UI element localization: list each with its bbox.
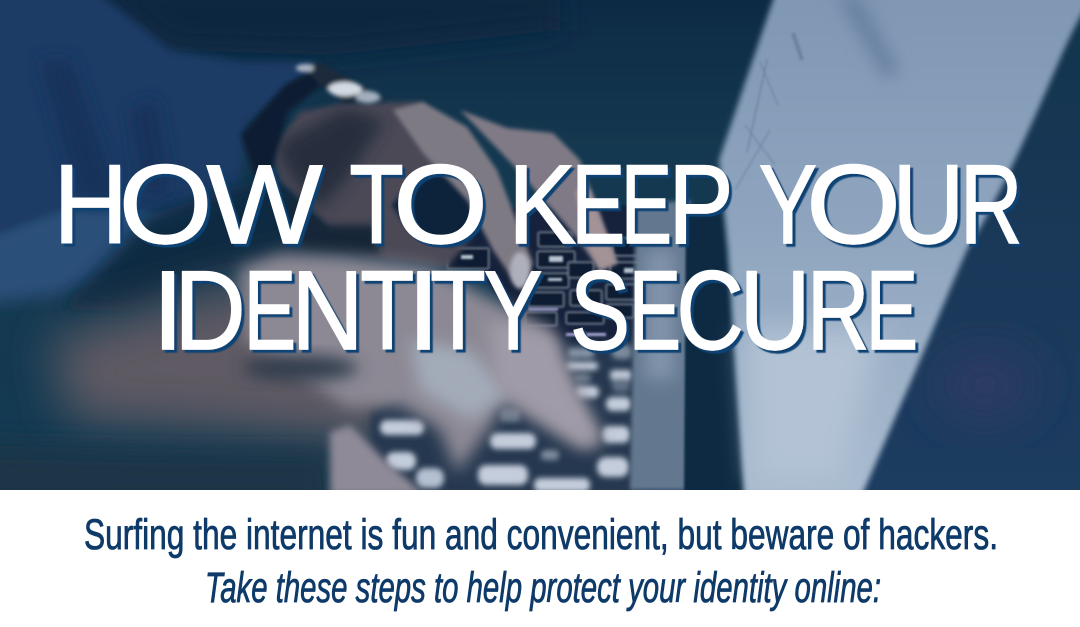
bright finger area [410,340,510,420]
title line 1: O [393,142,488,267]
title line 2: E [244,248,296,373]
key glyph highlights [461,255,634,336]
title line 2: C [676,248,744,373]
title line 2: I [152,248,184,373]
sleeve [0,0,320,245]
bottom left shadow [0,435,326,490]
dark crease [242,355,358,381]
lower hand, blurred wide [50,270,500,440]
watch body [296,62,386,103]
title line 2: N [291,248,364,373]
title line 2: Y [484,248,541,373]
dark gap between thumb and finger [392,172,488,246]
watch strap [241,66,322,178]
screen light lower-left [745,330,880,480]
title line 2: D [174,248,246,373]
screen shade band [835,0,900,80]
second finger lower, pink [575,190,617,270]
purple tint on the right [935,350,1035,420]
second finger [460,110,617,270]
lower keyboard base [370,340,642,495]
top dark shade [178,30,398,38]
title line 2 [152,248,918,373]
title line 2: E [629,248,681,373]
sleeve fold shade [40,60,170,200]
laptop body strip [630,200,690,490]
index finger [393,102,533,290]
title line 1: W [206,142,323,267]
title line 2: U [740,248,810,373]
upper hand back [274,99,472,269]
title line 1: O [119,142,212,267]
title [54,142,1022,267]
title line 2: T [360,248,414,373]
title line 2: I [407,248,440,373]
right lower finger [490,320,603,448]
title line 1: E [621,142,672,267]
title line 1: Y [759,142,817,267]
title line 1: T [349,142,404,267]
title line 2: T [430,248,486,373]
upper keys [447,232,640,326]
dark band beside the screen [684,200,745,495]
hand underside shade [285,190,380,256]
title line 1: R [960,142,1022,267]
title line 2: S [570,248,630,373]
area right of the screen [865,242,1080,490]
laptop screen [719,0,1080,495]
title line 1: P [668,142,732,267]
title line 1: E [571,142,625,267]
lower arm, light blue [0,207,164,308]
screen chart details [735,33,802,190]
title line 2: R [807,248,870,373]
title line 1: K [508,142,576,267]
upper keyboard base [465,204,636,342]
thumb [330,425,425,495]
title line 2: E [866,248,918,373]
title line 1: O [806,142,901,267]
dark hand-shadow band [68,179,296,308]
title line 1: H [54,142,128,267]
fingertip highlight [510,252,530,288]
lower hand sharp top [240,254,600,473]
lower keys [380,345,632,492]
title line 1: U [892,142,965,267]
upper hand shaded wrist [275,108,385,210]
laptop strip highlight [645,250,675,380]
